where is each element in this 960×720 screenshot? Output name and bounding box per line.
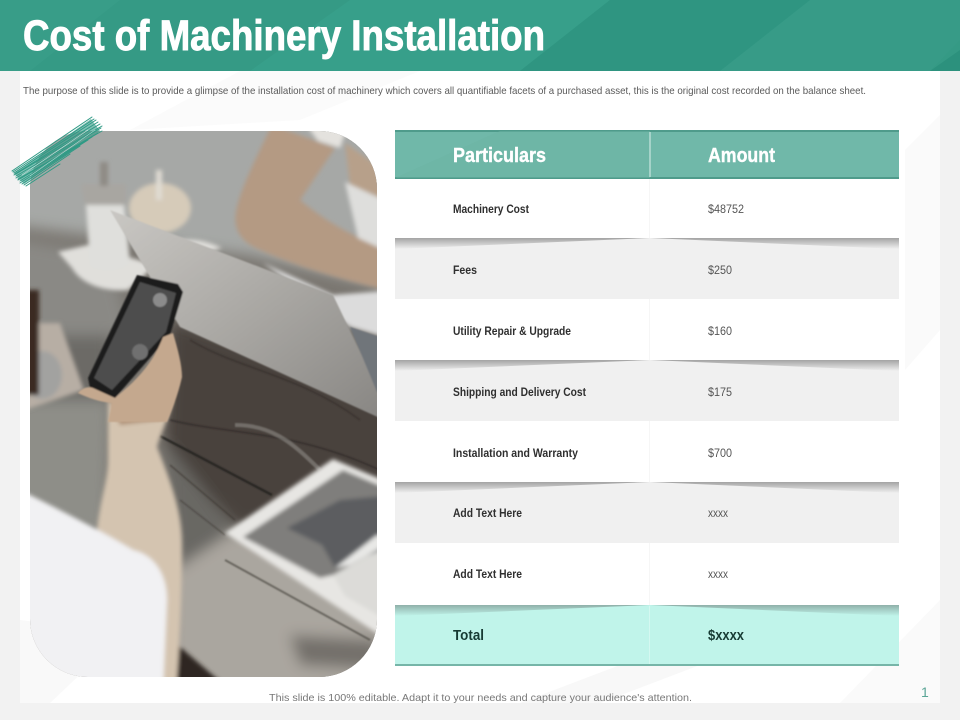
row: Total [395, 605, 899, 666]
row: Machinery Cost [395, 179, 899, 238]
row: Total: $xxxx [708, 628, 744, 644]
shirt [30, 492, 170, 677]
laptop body [264, 263, 377, 336]
row: Add Text Here one [395, 482, 899, 543]
row: Shipping and Delivery Cost: Shipping and Delivery Cost [453, 387, 586, 399]
sugar dispenser [86, 205, 130, 270]
photo: people working at a wooden table with phone, laptop and tablet [30, 131, 377, 677]
row: Machinery Cost: Machinery Cost [453, 204, 529, 216]
row: Add Text Here two [395, 543, 899, 605]
table header row: Amount [708, 144, 775, 167]
coffee cup [129, 183, 191, 233]
row: Utility Repair and Upgrade: $160 [708, 326, 732, 338]
row: Total: Total [453, 628, 484, 644]
row: Installation and Warranty: $700 [708, 448, 732, 460]
row: Installation and Warranty [395, 421, 899, 482]
row: Add Text Here two: Add Text Here [453, 569, 522, 581]
table header row: Particulars [453, 144, 546, 167]
laptop keyboard [350, 326, 377, 392]
glass and napkin left [25, 323, 84, 410]
row: Add Text Here one: xxxx [708, 508, 728, 520]
hand [78, 333, 182, 422]
row: Installation and Warranty: Installation and Warranty [453, 448, 579, 460]
title bar [0, 0, 960, 71]
forearm [97, 400, 182, 690]
footer note: This slide is 100% editable. Adapt it to your needs and capture your audience's attention. [269, 692, 692, 704]
row: Fees: Fees [453, 265, 477, 277]
row: Fees: $250 [708, 265, 732, 277]
table header row [395, 130, 899, 179]
row: Shipping and Delivery Cost [395, 360, 899, 421]
tablet [224, 456, 377, 634]
row: Utility Repair and Upgrade [395, 299, 899, 360]
row: Add Text Here one: Add Text Here [453, 508, 522, 520]
row: Shipping and Delivery Cost: $175 [708, 387, 732, 399]
title: Cost of Machinery Installation [23, 12, 545, 60]
icon: teal brush stroke [12, 117, 102, 186]
description text: The purpose of this slide is to provide a glimpse of the installation cost of machinery which covers all quantifiable facets of a purchased asset, this is the original cost recorded on the balance sheet. [23, 85, 866, 97]
row: Add Text Here two: xxxx [708, 569, 728, 581]
dark gap bottom of the table [175, 646, 220, 677]
saucer and napkin [58, 240, 222, 290]
table [395, 130, 899, 666]
laptop lid [110, 210, 395, 425]
row: Utility Repair and Upgrade: Utility Repair & Upgrade [453, 326, 571, 338]
arm at top right [235, 125, 395, 292]
row: Fees [395, 238, 899, 299]
page number: 1 [921, 684, 929, 700]
row: Machinery Cost: $48752 [708, 204, 744, 216]
phone [88, 275, 183, 398]
